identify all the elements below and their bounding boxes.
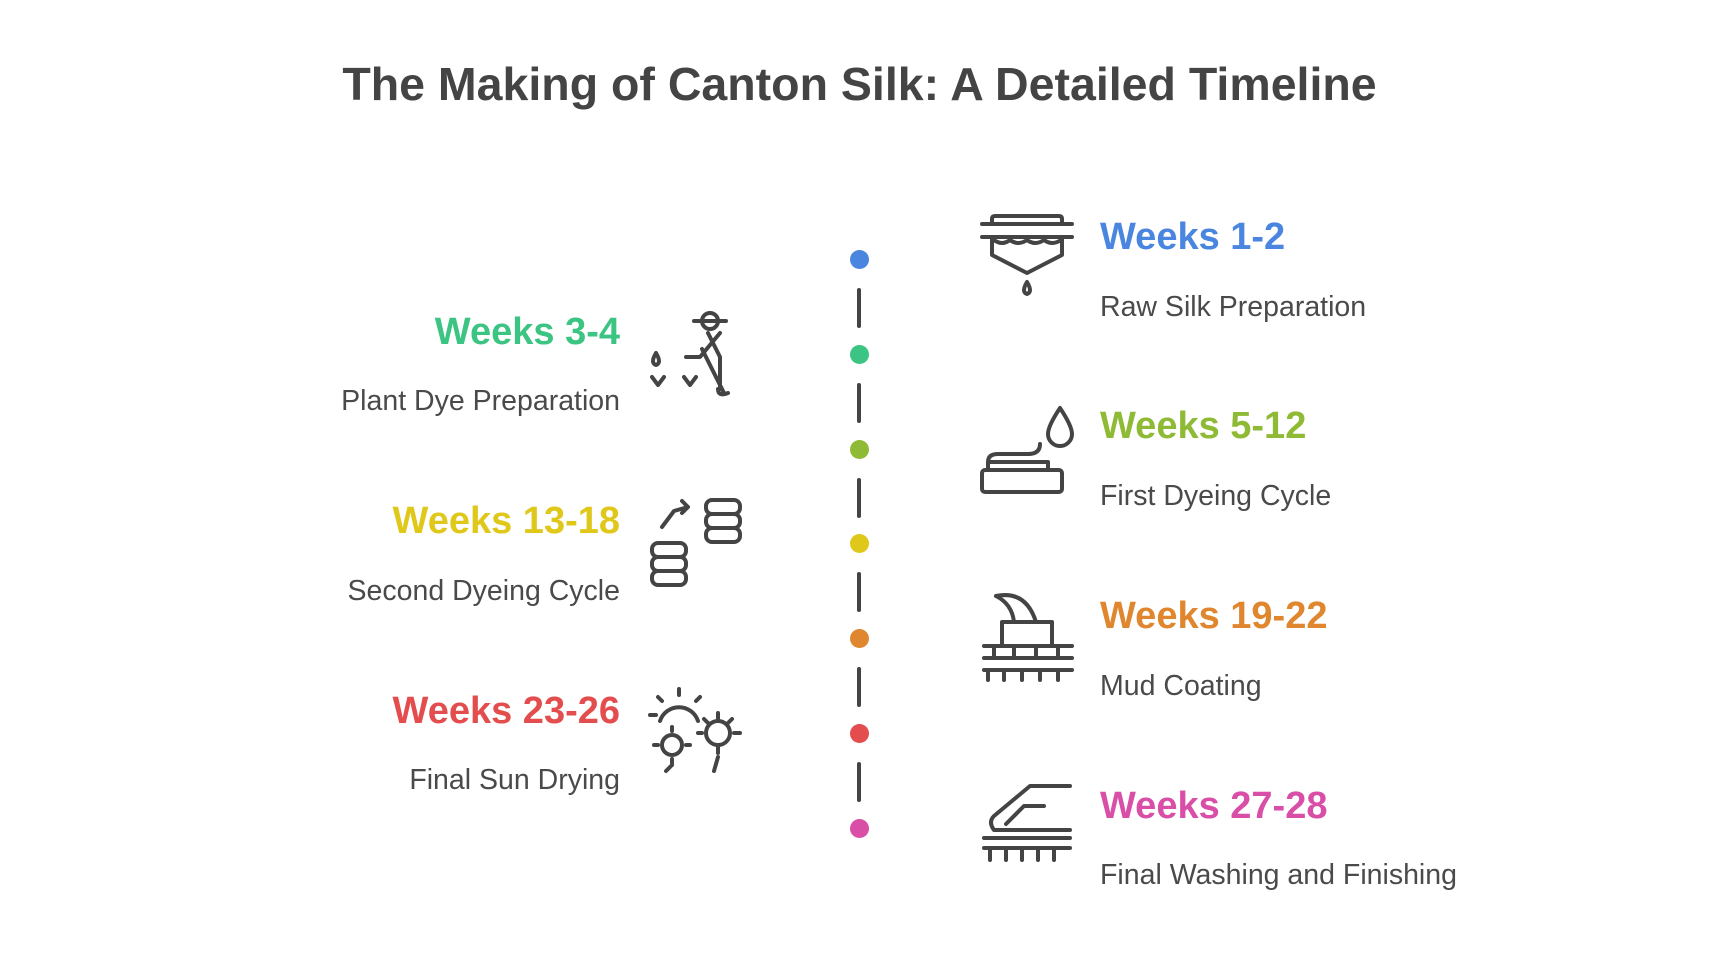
icon: stacks bbox=[650, 498, 742, 587]
step 4: Weeks 13-18 bbox=[393, 500, 620, 542]
icon: filter drip bbox=[980, 214, 1074, 296]
text: First Dyeing Cycle bbox=[1100, 480, 1331, 512]
text: Final Washing and Finishing bbox=[1100, 859, 1457, 891]
text: Final Sun Drying bbox=[409, 764, 620, 796]
text: Second Dyeing Cycle bbox=[348, 575, 620, 607]
text: Mud Coating bbox=[1100, 670, 1262, 702]
step 2: Weeks 3-4 bbox=[435, 311, 620, 353]
icon: farmer bbox=[650, 311, 730, 396]
icon: mud machine bbox=[982, 593, 1074, 682]
title: The Making of Canton Silk: A Detailed Timeline bbox=[342, 58, 1377, 110]
text: Plant Dye Preparation bbox=[341, 385, 620, 417]
step 3: Weeks 5-12 bbox=[1100, 405, 1306, 447]
icon: train/press bbox=[982, 784, 1072, 862]
step 5: Weeks 19-22 bbox=[1100, 595, 1327, 637]
icon: dye bowl bbox=[980, 406, 1074, 494]
text: Raw Silk Preparation bbox=[1100, 291, 1366, 323]
step 7: Weeks 27-28 bbox=[1100, 785, 1327, 827]
icon: sun drying bbox=[648, 687, 742, 774]
step 1: Weeks 1-2 bbox=[1100, 216, 1285, 258]
step 6: Weeks 23-26 bbox=[393, 690, 620, 732]
timeline bbox=[850, 250, 869, 838]
